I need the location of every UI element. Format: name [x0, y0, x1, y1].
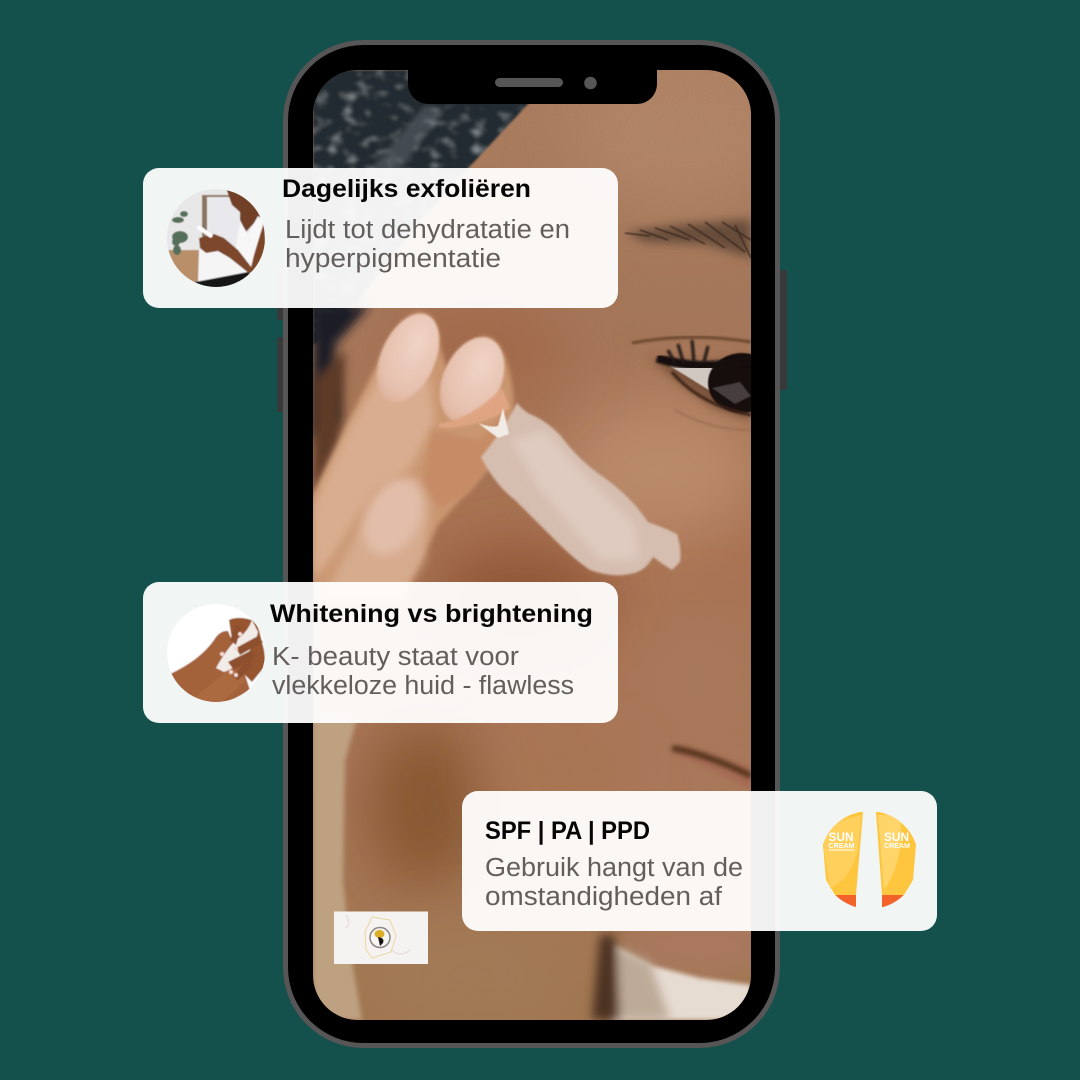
body text [485, 854, 743, 911]
body text [272, 643, 574, 700]
nail: middle finger [439, 336, 506, 421]
logo sticker [334, 912, 428, 964]
neck shadow [592, 935, 618, 1020]
hand with fingers [313, 304, 517, 600]
screen photo: skin care on a face [313, 70, 751, 1020]
card: SPF PA PPD [462, 791, 937, 931]
skin pores [500, 70, 751, 370]
body text: Lijdt tot dehydratatie en [285, 216, 570, 244]
nail: index finger [376, 312, 440, 402]
photo: cream on legs [165, 602, 267, 704]
shadow under towel [313, 305, 370, 440]
body text [285, 216, 570, 273]
icon: sun cream tubes: SUN [884, 830, 909, 844]
phone [277, 42, 790, 1046]
lower finger [328, 476, 432, 582]
notch [408, 70, 657, 104]
collar of white shirt [612, 945, 751, 1020]
body text: Gebruik hangt van de [485, 854, 743, 882]
body text: vlekkeloze huid - flawless [272, 672, 574, 700]
phone side buttons [277, 270, 787, 412]
left pale blurred shoulder [313, 715, 362, 1020]
eyebrow [625, 219, 751, 258]
heading: Whitening vs brightening [270, 600, 593, 628]
icon: sun cream tubes: CREAM [884, 841, 910, 850]
lip [672, 745, 751, 790]
heading: Dagelijks exfoliëren [282, 175, 531, 203]
cream swipe [478, 403, 681, 575]
speaker [495, 78, 563, 87]
icon: sun cream tubes [823, 812, 916, 908]
icon: sun cream tubes: SUN [828, 830, 854, 844]
body text: hyperpigmentatie [285, 245, 501, 273]
card: whitening vs brightening [143, 582, 618, 723]
icon: sun cream tubes: CREAM [828, 841, 854, 850]
infographic canvas [143, 40, 937, 1048]
towel on hair [313, 70, 530, 346]
body text: omstandigheden af [485, 883, 723, 911]
phone body [286, 42, 778, 1046]
card: daily exfoliating [143, 168, 618, 308]
eye [631, 336, 751, 431]
photo: woman applying serum [165, 187, 267, 290]
cheek tones [346, 70, 751, 970]
camera [584, 77, 597, 89]
body text: K- beauty staat voor [272, 643, 520, 671]
heading: SPF | PA | PPD [485, 817, 650, 845]
